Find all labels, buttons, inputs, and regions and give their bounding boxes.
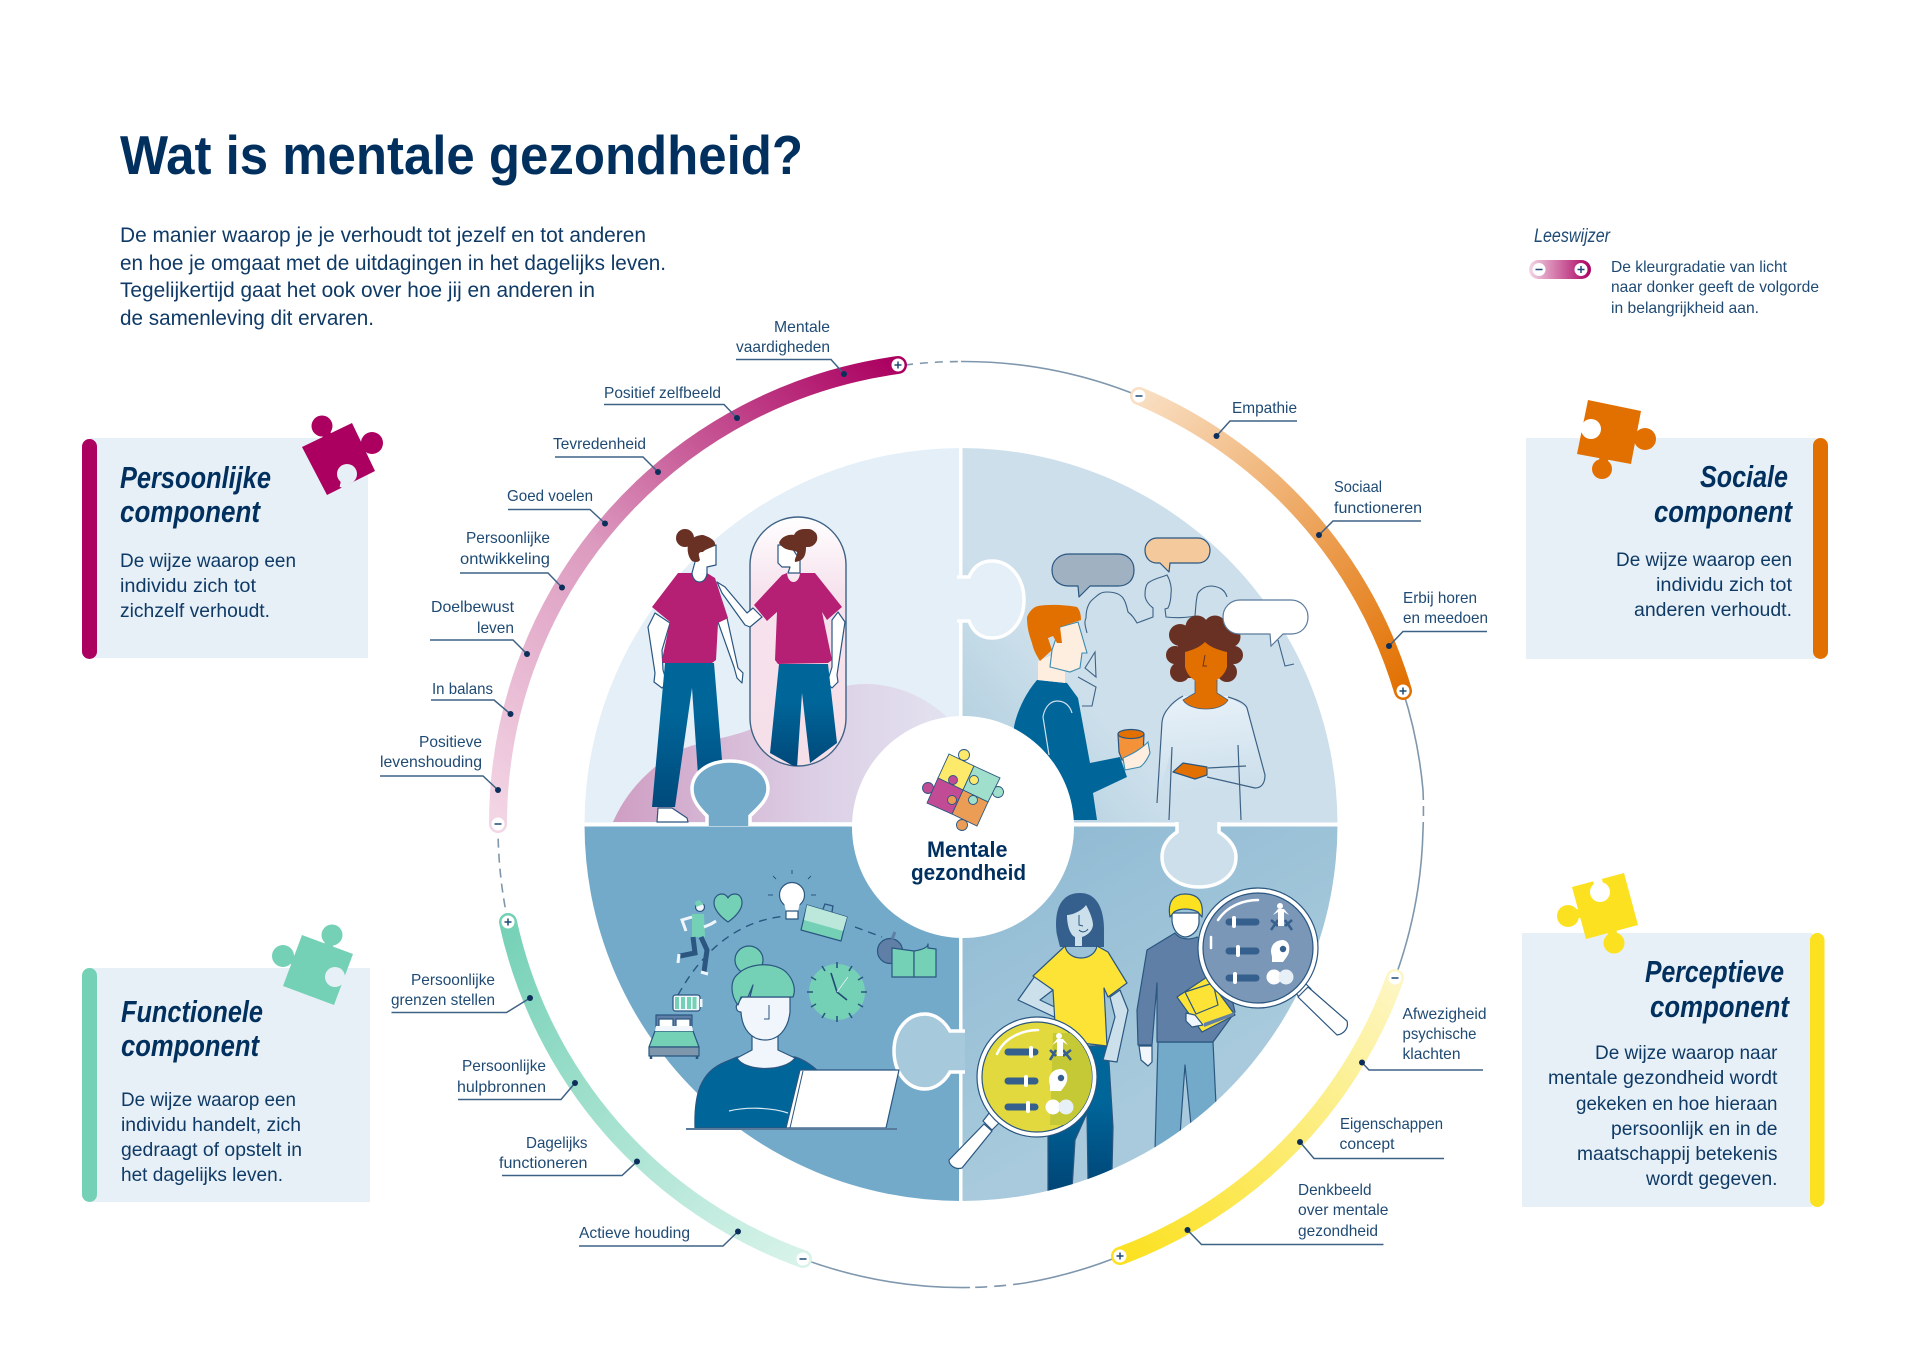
woman: hand [1173, 763, 1207, 779]
puzzle knob: into top-left [692, 761, 768, 826]
labels: persoonlijke component: Goed voelen [507, 488, 593, 505]
labels: persoonlijke component: Mentale [774, 319, 830, 336]
panel: sociale component: Sociale [1700, 459, 1788, 494]
man: face [1172, 913, 1199, 937]
panel: functionele component: Functionele [121, 994, 263, 1029]
hill [613, 684, 950, 822]
panel: persoonlijke component: Persoonlijke [120, 460, 271, 495]
labels: functionele component: Persoonlijke [411, 972, 495, 989]
woman: shirt [1033, 946, 1127, 1046]
center label: mentale gezondheid [911, 750, 1026, 885]
magnifier: left [949, 1017, 1097, 1168]
labels: persoonlijke component: In balans [432, 681, 493, 698]
battery [673, 995, 702, 1011]
labels: sociale component: Sociaal [1334, 479, 1382, 496]
labels: perceptieve component: gezondheid [1298, 1223, 1378, 1240]
panel: functionele component [82, 924, 370, 1202]
apple [878, 932, 902, 964]
panel: sociale component: anderen verhoudt. [1634, 599, 1792, 621]
labels: functionele component: hulpbronnen [457, 1079, 546, 1096]
quadrant: bottom-left [580, 826, 959, 1206]
intro text [120, 224, 666, 330]
labels: persoonlijke component [380, 319, 847, 793]
woman: arms [1018, 976, 1065, 1022]
labels: perceptieve component: Afwezigheid [1402, 1006, 1486, 1023]
labels: perceptieve component: Eigenschappen [1340, 1116, 1443, 1133]
labels: perceptieve component: psychische [1402, 1026, 1477, 1043]
illustration: person and mirror [648, 517, 846, 822]
panel: persoonlijke component [82, 416, 383, 659]
legend: leeswijzer: Leeswijzer [1534, 226, 1611, 247]
labels: sociale component: en meedoen [1403, 610, 1488, 627]
icon: green puzzle piece [272, 924, 353, 1005]
labels: perceptieve component [1184, 1006, 1486, 1244]
panel: sociale component: De wijze waarop een [1616, 549, 1792, 571]
labels: persoonlijke component: Persoonlijke [466, 530, 550, 547]
book [892, 944, 936, 977]
labels: persoonlijke component: ontwikkeling [460, 551, 550, 568]
center circle [852, 716, 1074, 938]
man: face [1050, 622, 1087, 672]
lightbulb [768, 870, 816, 919]
illustration: two people with magnifiers [949, 888, 1347, 1200]
man: pants [1155, 1042, 1216, 1150]
panel: perceptieve component: mentale gezondheid wordt [1548, 1067, 1778, 1089]
intro text: De manier waarop je je verhoudt tot jezelf en tot anderen [120, 224, 646, 247]
panel: functionele component: component [121, 1028, 260, 1063]
intro text: de samenleving dit ervaren. [120, 307, 374, 330]
labels: perceptieve component: klachten [1402, 1046, 1460, 1063]
legend: leeswijzer: in belangrijkheid aan. [1611, 300, 1759, 317]
person hair [688, 535, 715, 562]
quadrant: top-left [580, 440, 959, 822]
person face [692, 545, 716, 582]
icon: purple puzzle piece [302, 416, 383, 495]
quadrant: top-right [962, 440, 1342, 822]
man: neck [1038, 655, 1065, 683]
arc: sociaal, light to dark [1132, 390, 1410, 698]
labels: functionele component: Persoonlijke [462, 1058, 546, 1075]
speech bubble: grey [1052, 554, 1134, 597]
panel: persoonlijke component: De wijze waarop een [120, 550, 296, 572]
arc: functioneel, dark to light [502, 916, 810, 1266]
panel: perceptieve component: Perceptieve [1645, 954, 1784, 989]
person shoe [657, 808, 688, 822]
panel: functionele component: het dagelijks leven. [121, 1164, 283, 1186]
puzzle knob: into bottom-right [1162, 822, 1236, 887]
panel: perceptieve component: maatschappij betekenis [1577, 1143, 1778, 1165]
panel: functionele component: De wijze waarop een [121, 1089, 296, 1111]
heart [714, 894, 742, 922]
panel: sociale component: individu zich tot [1656, 574, 1793, 596]
legend: leeswijzer: De kleurgradatie van licht [1611, 259, 1788, 276]
central puzzle disc [580, 440, 1342, 1206]
magnifier: right [1198, 888, 1347, 1035]
labels: persoonlijke component: leven [477, 620, 514, 637]
labels: sociale component: Empathie [1232, 400, 1297, 417]
labels: perceptieve component: over mentale [1298, 1202, 1389, 1219]
panel: perceptieve component: persoonlijk en in de [1611, 1118, 1778, 1140]
speech bubble: orange [1145, 538, 1210, 572]
panel: perceptieve component: De wijze waarop naar [1595, 1042, 1778, 1064]
labels: perceptieve component: concept [1340, 1136, 1395, 1153]
reaching arm [717, 582, 762, 627]
labels: functionele component: grenzen stellen [391, 992, 495, 1009]
labels: persoonlijke component: levenshouding [380, 754, 482, 771]
panel: perceptieve component: component [1650, 989, 1790, 1024]
cup [1118, 730, 1144, 760]
labels: sociale component [1214, 400, 1488, 649]
man: hand [1123, 742, 1150, 770]
panel: functionele component: gedraagt of opstelt in [121, 1139, 302, 1161]
panel: persoonlijke component: individu zich tot [120, 575, 257, 597]
bed [649, 1015, 699, 1059]
background silhouettes [1078, 575, 1294, 706]
intro text: Tegelijkertijd gaat het ook over hoe jij en anderen in [120, 279, 595, 302]
panel: perceptieve component: gekeken en hoe hieraan [1576, 1093, 1778, 1115]
labels: persoonlijke component: Positieve [419, 734, 482, 751]
panel: perceptieve component: wordt gegeven. [1645, 1168, 1778, 1190]
labels: functionele component [391, 972, 741, 1246]
title: Wat is mentale gezondheid? [120, 124, 803, 186]
legend: leeswijzer: naar donker geeft de volgorde [1611, 279, 1819, 296]
woman: pants [1048, 1046, 1113, 1200]
woman: hair [1166, 616, 1243, 682]
panel: perceptieve component [1522, 873, 1824, 1207]
labels: functionele component: functioneren [499, 1155, 588, 1172]
hair [735, 946, 763, 974]
puzzle knob: into top-right [957, 561, 1024, 638]
intro text: en hoe je omgaat met de uitdagingen in het dagelijks leven. [120, 252, 666, 275]
panel: persoonlijke component: component [120, 494, 261, 529]
man: body [1014, 680, 1127, 820]
clock [807, 962, 867, 1022]
briefcase [801, 904, 847, 941]
panel: sociale component: component [1654, 494, 1793, 529]
quadrant: bottom-right [962, 826, 1342, 1206]
neck and face [737, 1035, 795, 1068]
speech bubble: white [1223, 600, 1308, 646]
labels: persoonlijke component: vaardigheden [736, 339, 830, 356]
woman: hair [1056, 893, 1104, 947]
labels: persoonlijke component: Positief zelfbeeld [604, 385, 721, 402]
labels: persoonlijke component: Doelbewust [431, 599, 515, 616]
center label: mentale gezondheid: Mentale [927, 837, 1008, 862]
woman: face and neck [1067, 905, 1093, 946]
man: book and hand [1177, 977, 1235, 1032]
reflection [770, 612, 845, 768]
woman: neck and collar [1183, 680, 1228, 709]
body [695, 1057, 817, 1128]
icon: four-piece puzzle [922, 750, 1004, 830]
person shirt [652, 573, 728, 663]
woman: face [1185, 642, 1227, 683]
labels: persoonlijke component: Tevredenheid [553, 436, 646, 453]
center label: mentale gezondheid: gezondheid [911, 860, 1026, 885]
infographic [82, 134, 1828, 1288]
icon: orange puzzle piece [1577, 400, 1656, 479]
person pants [652, 663, 723, 807]
legend: leeswijzer [1529, 226, 1819, 317]
man: sweater [1137, 933, 1235, 1045]
arc: persoonlijke, light to dark [492, 358, 904, 830]
labels: sociale component: Erbij horen [1403, 590, 1477, 607]
labels: functionele component: Actieve houding [579, 1225, 690, 1242]
man: hair [1169, 894, 1202, 917]
person arms [648, 613, 670, 688]
arc: perceptief, light to dark [1114, 972, 1402, 1262]
thin outer ring [498, 361, 1423, 1288]
puzzle knob: into bottom-left [894, 1014, 965, 1089]
panel: sociale component [1526, 400, 1828, 659]
laptop [786, 1070, 899, 1128]
labels: sociale component: functioneren [1334, 500, 1422, 517]
man: hair [1027, 605, 1081, 661]
runner [678, 900, 716, 974]
dashed arc [678, 916, 882, 995]
icon: yellow puzzle piece [1557, 873, 1638, 954]
labels: perceptieve component: Denkbeeld [1298, 1182, 1372, 1199]
panel: persoonlijke component: zichzelf verhoudt. [120, 600, 270, 622]
panel: functionele component: individu handelt, zich [121, 1114, 301, 1136]
illustration: woman at laptop with daily-life icons [649, 870, 936, 1129]
illustration: two people talking [1014, 538, 1308, 820]
woman: torso [1157, 696, 1265, 820]
labels: functionele component: Dagelijks [526, 1135, 588, 1152]
reflection hair and bun [799, 529, 817, 547]
mirror [750, 517, 846, 766]
